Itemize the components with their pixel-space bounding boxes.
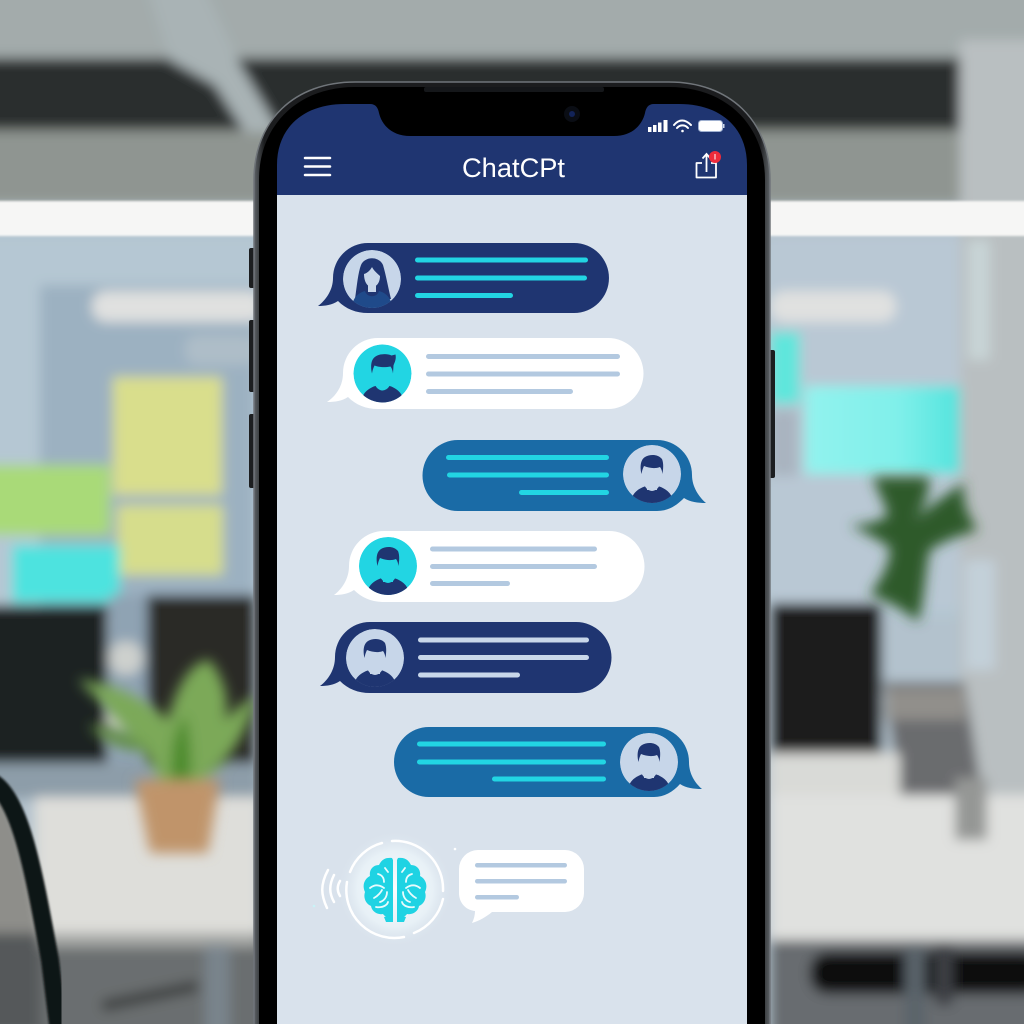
- message lines: [446, 455, 609, 495]
- floor: [0, 933, 270, 1024]
- phone: [249, 82, 775, 1024]
- right column: [960, 40, 1024, 800]
- screen background: [277, 195, 747, 1024]
- signal bars: [648, 120, 668, 132]
- chat bubble 6: blue, right aligned: [394, 727, 702, 797]
- monitors: [0, 605, 108, 763]
- wifi icon: [674, 120, 691, 132]
- message lines: [430, 546, 597, 586]
- message lines: [418, 638, 589, 678]
- avatar: man on light disc: [620, 733, 678, 792]
- status icons: [648, 120, 724, 132]
- left plant: [78, 660, 256, 853]
- message lines: [475, 863, 567, 900]
- avatar: man on cyan: [359, 537, 417, 596]
- AI assistant brain badge: [313, 831, 456, 947]
- sparkle dots: [313, 848, 456, 907]
- notch speaker: [424, 87, 604, 92]
- sticky notes: [113, 377, 222, 495]
- assistant reply bubble: [459, 850, 584, 923]
- front camera: [564, 106, 580, 122]
- message lines: [415, 258, 588, 298]
- chat bubble 2: white, cyan avatar: [327, 338, 644, 409]
- window wall: [0, 236, 960, 616]
- app title: ChatCPt: [462, 153, 566, 183]
- phone frame: [254, 82, 770, 1024]
- avatar: man on light disc: [623, 445, 681, 504]
- right plant: [850, 477, 978, 622]
- message lines: [417, 742, 606, 782]
- phone bezel: [259, 87, 765, 1024]
- sound waves: [322, 870, 340, 908]
- ceiling: [0, 0, 1024, 62]
- message lines: [426, 354, 620, 394]
- chat bubble 4: white, cyan avatar: [334, 531, 644, 602]
- brain icon: [364, 858, 426, 922]
- battery icon: [698, 120, 724, 132]
- chat bubble 3: blue, right aligned: [422, 440, 706, 511]
- chat bubble 1: navy, female avatar: [318, 243, 609, 313]
- right chair: [884, 682, 982, 795]
- avatar: man on cyan: [354, 344, 412, 404]
- desks: [35, 797, 260, 933]
- left chair: [0, 790, 42, 933]
- chat bubble 5: navy, male avatar: [320, 622, 612, 693]
- ceiling light band: [0, 201, 1024, 236]
- brain folds: [370, 868, 420, 907]
- share icon with badge: [696, 151, 721, 178]
- side buttons: [249, 248, 775, 488]
- avatar: man on light disc: [346, 629, 404, 688]
- app header bar: [277, 104, 747, 195]
- hamburger menu icon: [305, 158, 330, 175]
- avatar: woman: [343, 250, 401, 309]
- ring: [346, 841, 443, 938]
- left chair back: [0, 782, 60, 1024]
